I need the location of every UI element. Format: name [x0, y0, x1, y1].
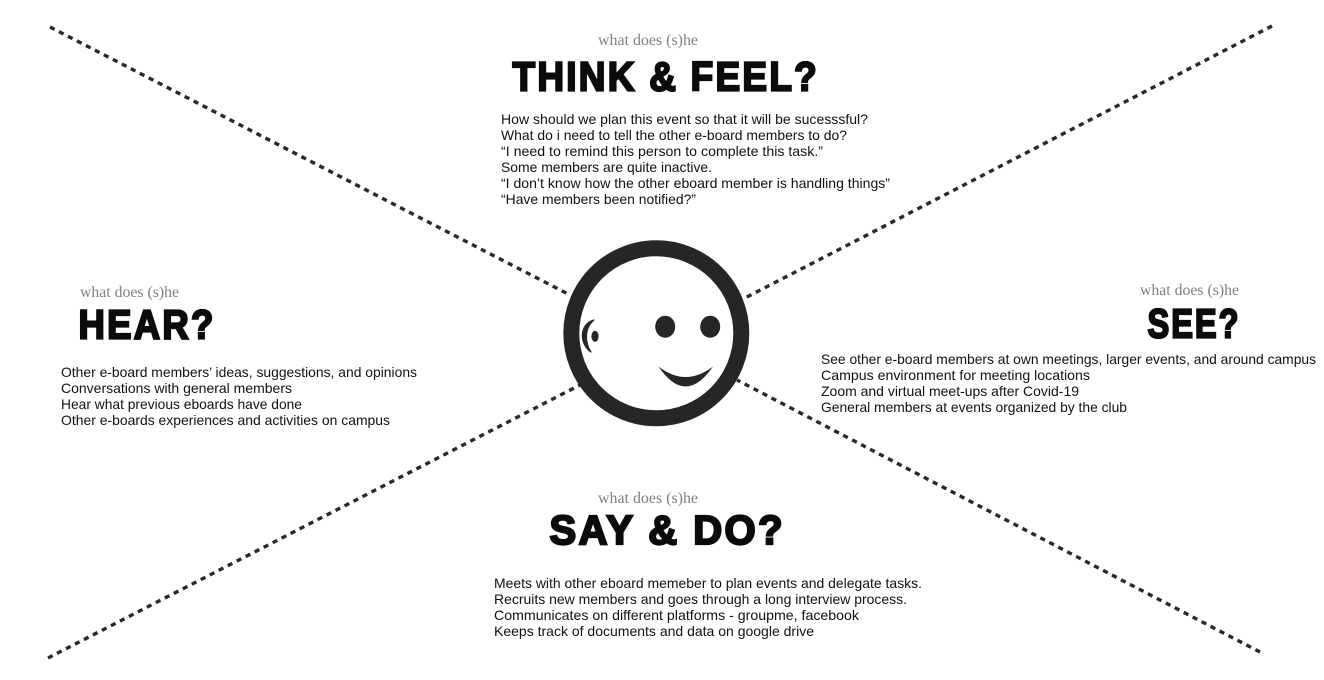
panel: say and do [494, 490, 922, 639]
text block: think and feel notes: Some members are quite inactive. [501, 159, 712, 175]
text block: think and feel notes: How should we plan this event so that it will be sucesssful? [501, 111, 868, 127]
text block: say and do notes: Communicates on different platforms - groupme, facebook [494, 607, 860, 623]
heading: see: SEE? [1148, 300, 1240, 346]
text block: hear notes: Conversations with general members [61, 380, 292, 396]
text block: see notes: General members at events organized by the club [821, 399, 1127, 415]
text block: see notes: Campus environment for meeting locations [821, 367, 1090, 383]
heading: hear: HEAR? [78, 302, 216, 348]
text block: see notes [821, 351, 1316, 415]
heading: say and do: SAY & DO? [550, 507, 785, 553]
text block: say and do notes: Meets with other eboard memeber to plan events and delegate tasks. [494, 575, 922, 591]
text block: think and feel notes [501, 111, 890, 207]
label: what does (s)he, hear: what does (s)he [80, 284, 179, 301]
heading: think and feel: THINK & FEEL? [512, 54, 819, 100]
panel: think and feel [501, 32, 890, 207]
text block: hear notes: Other e-board members’ ideas, suggestions, and opinions [61, 364, 417, 380]
label: what does (s)he, think: what does (s)he [598, 32, 698, 49]
text block: hear notes [61, 364, 417, 428]
icon: smiling face [571, 248, 741, 418]
text block: think and feel notes: “Have members been notified?” [501, 191, 696, 207]
text block: see notes: Zoom and virtual meet-ups after Covid-19 [821, 383, 1079, 399]
text block: say and do notes [494, 575, 922, 639]
panel: see [821, 282, 1316, 415]
label: what does (s)he, see: what does (s)he [1140, 282, 1239, 299]
label: what does (s)he, say: what does (s)he [598, 490, 698, 507]
text block: think and feel notes: What do i need to tell the other e-board members to do? [501, 127, 847, 143]
text block: hear notes: Hear what previous eboards have done [61, 396, 302, 412]
text block: think and feel notes: “I don’t know how the other eboard member is handling things” [501, 175, 890, 191]
text block: say and do notes: Recruits new members and goes through a long interview process. [494, 591, 907, 607]
text block: say and do notes: Keeps track of documents and data on google drive [494, 623, 814, 639]
text block: see notes: See other e-board members at own meetings, larger events, and around campus [821, 351, 1316, 367]
text block: think and feel notes: “I need to remind this person to complete this task.” [501, 143, 823, 159]
panel: hear [61, 284, 417, 428]
text block: hear notes: Other e-boards experiences and activities on campus [61, 412, 390, 428]
